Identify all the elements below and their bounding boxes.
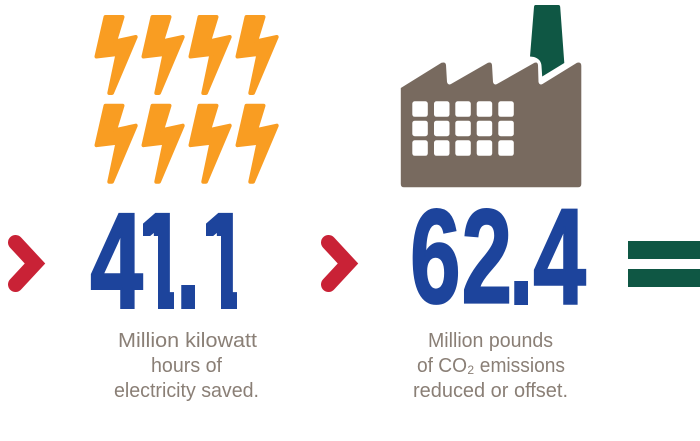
- caption: electricity saved: hours of: [151, 355, 222, 377]
- statistic: 62.4: 2: [462, 182, 512, 332]
- caption: CO2 emissions: of CO₂ emissions: [417, 355, 565, 377]
- caption: electricity saved: electricity saved.: [114, 380, 259, 402]
- icon: left chevron: [16, 242, 35, 284]
- statistic: 62.4: 6: [410, 182, 461, 332]
- statistic: 41.1: 4: [90, 185, 143, 337]
- icon: factory: [401, 5, 581, 187]
- factory chimney: [530, 5, 564, 76]
- caption: CO2 emissions: [413, 330, 568, 402]
- icon: lightning bolts: [96, 17, 277, 182]
- statistic: 41.1: .: [177, 187, 199, 336]
- caption: CO2 emissions: reduced or offset.: [413, 380, 568, 402]
- statistic: 41.1: 1: [132, 186, 187, 337]
- icon: middle chevron: [328, 242, 348, 284]
- statistic: 62.4: [410, 181, 586, 332]
- icon: equals sign: [628, 241, 700, 287]
- statistic: 41.1: 1: [194, 186, 250, 337]
- factory building: [401, 62, 581, 187]
- caption: electricity saved: Million kilowatt: [118, 330, 257, 352]
- statistic: 41.1: [90, 212, 237, 309]
- factory windows: [412, 101, 514, 156]
- caption: electricity saved: [114, 330, 259, 402]
- statistic: 62.4: .: [510, 183, 532, 332]
- caption: CO2 emissions: Million pounds: [428, 330, 553, 352]
- statistic: 62.4: 4: [534, 181, 586, 332]
